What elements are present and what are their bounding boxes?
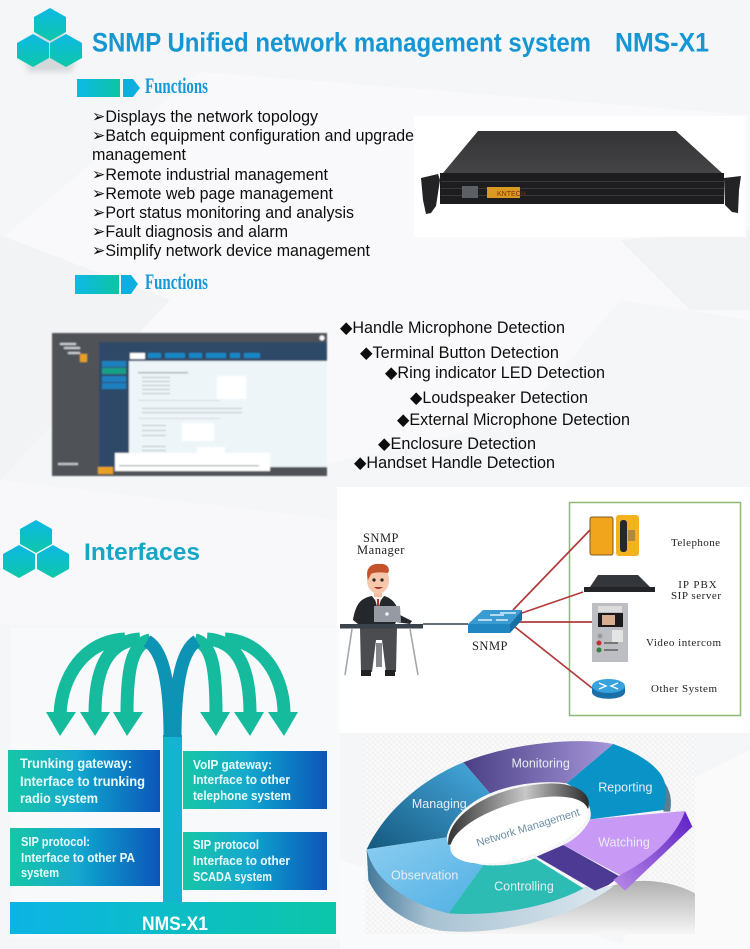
heading: functions 2: Functions (145, 269, 208, 294)
chart: network management ring (365, 735, 695, 934)
ring side (367, 849, 613, 932)
segment: managing (367, 762, 490, 849)
heading: functions 1: Functions (145, 73, 208, 98)
list: detection features: ◆Terminal Button Detection (360, 344, 559, 362)
label: sip server: SIP server (671, 590, 722, 602)
segment: observation: Observation (391, 868, 458, 882)
label: snmp manager: SNMP (363, 531, 399, 545)
ring hole (443, 783, 596, 877)
box: sip protocol scada (183, 832, 327, 890)
list: detection features: ◆Loudspeaker Detection (410, 389, 588, 407)
product photo: rack server: KNTECH (497, 191, 526, 198)
list: detection features: ◆External Microphone Detection (397, 411, 630, 429)
icon: network switch (468, 610, 522, 633)
segment: watching: Watching (598, 835, 650, 849)
box: sip protocol pa: Interface to other PA (21, 851, 135, 865)
box: trunking gateway (8, 750, 160, 812)
segment: monitoring (463, 741, 613, 793)
list: functions: ➢Fault diagnosis and alarm (92, 222, 288, 241)
box: trunking gateway: radio system (20, 790, 98, 806)
label: video intercom: Video intercom (646, 637, 722, 649)
box: trunking gateway: Interface to trunking (20, 773, 145, 789)
icon: manager at desk (340, 564, 423, 676)
list: functions: ➢Displays the network topology (92, 107, 318, 126)
list: functions: management (92, 145, 186, 164)
label: other system: Other System (651, 683, 718, 695)
segment: observation (367, 837, 483, 913)
segment: controlling (448, 858, 583, 914)
label: telephone: Telephone (671, 537, 721, 549)
heading: functions 2 (75, 269, 208, 294)
segment: controlling: Controlling (494, 880, 554, 894)
list: functions: ➢Batch equipment configuration and upgrade (92, 126, 414, 145)
heading: interfaces: Interfaces (84, 539, 200, 566)
box: voip gateway (183, 751, 327, 809)
icon: hexagon logo interfaces (3, 520, 69, 578)
box: voip gateway: VoIP gateway: (193, 758, 272, 772)
base bar: nms-x1 (10, 902, 336, 935)
list: detection features: ◆Handle Microphone Detection (340, 319, 565, 337)
box: sip protocol pa (10, 828, 160, 886)
label: snmp switch: SNMP (472, 639, 508, 653)
segment: reporting: Reporting (598, 780, 652, 794)
box: voip gateway: Interface to other (193, 773, 290, 787)
segment: monitoring: Monitoring (512, 757, 570, 771)
trunk upper branches (147, 641, 197, 737)
right edge (663, 783, 671, 812)
arrows: right fan (195, 639, 298, 736)
box: sip protocol scada: SIP protocol (193, 838, 259, 852)
segment: watching (537, 811, 692, 891)
panel: interfaces tree (8, 628, 340, 938)
screenshot: management software (52, 333, 327, 476)
list: functions: ➢Remote industrial management (92, 165, 328, 184)
list: functions: ➢Remote web page management (92, 184, 333, 203)
icon: telephone (590, 515, 639, 556)
label: manager: Manager (357, 543, 405, 557)
box: sip protocol pa: system (21, 866, 59, 880)
trunk (163, 735, 182, 902)
product photo: rack server (414, 116, 746, 237)
list: functions (92, 107, 414, 260)
box: sip protocol scada: SCADA system (193, 870, 272, 884)
label: ip pbx: IP PBX (678, 579, 718, 591)
segment: reporting (567, 744, 666, 819)
list: functions: ➢Port status monitoring and analysis (92, 203, 354, 222)
box: trunking gateway: Trunking gateway: (20, 755, 132, 771)
title: NMS-X1 (615, 28, 709, 58)
diagram: snmp topology (337, 487, 750, 733)
ring hole: Network Management (475, 807, 581, 849)
base bar: nms-x1: NMS-X1 (142, 914, 208, 935)
list: detection features: ◆Ring indicator LED Detection (385, 364, 605, 382)
connection lines (423, 530, 593, 688)
list: detection features: ◆Handset Handle Detection (354, 454, 555, 472)
icon: ip pbx server (584, 575, 655, 592)
device group box (570, 502, 740, 716)
list: detection features (340, 319, 630, 472)
list: detection features: ◆Enclosure Detection (378, 435, 536, 453)
box: voip gateway: telephone system (193, 789, 291, 803)
segment: managing: Managing (412, 797, 467, 811)
icon: video intercom (592, 603, 628, 662)
box: sip protocol scada: Interface to other (193, 854, 290, 868)
box: sip protocol pa: SIP protocol: (21, 835, 90, 849)
icon: hexagon logo top (17, 8, 82, 72)
icon: router (592, 679, 625, 699)
title: SNMP Unified network management system (92, 28, 591, 58)
ground shadow (450, 881, 695, 934)
list: functions: ➢Simplify network device management (92, 241, 370, 260)
arrows: left fan (46, 639, 150, 736)
heading: functions 1 (77, 73, 208, 98)
